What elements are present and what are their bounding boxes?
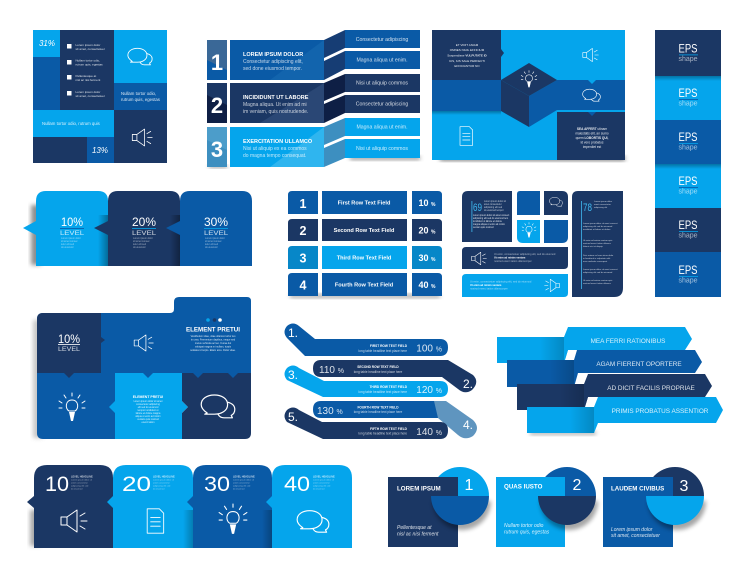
- ribbon 1: [284, 324, 448, 356]
- level tab 20: LEVEL: [132, 231, 157, 237]
- icon tab 30: LEVEL HEADLINE: [233, 474, 255, 478]
- text block bottom right: id vero probatus: [581, 140, 604, 144]
- EPS row 5: [655, 208, 721, 252]
- ribbon 2: long table headline text place here: [354, 370, 403, 374]
- ribbon 4: long table headline text place here: [354, 410, 403, 414]
- panel: circle card 1: LOREM IPSUM: [397, 486, 441, 492]
- ribbon 3: [284, 366, 448, 397]
- text tile 69: veniam quis nostrud: [473, 226, 494, 229]
- panel: numbered icon tabs: [27, 465, 352, 548]
- tile: center text: ELEMENT PRETUI: [133, 395, 163, 399]
- EPS row 3: shape: [678, 144, 698, 152]
- tall text tile 78: Duis autem vel eum iriure dolor: [583, 254, 614, 257]
- wide navy tile: [462, 247, 568, 269]
- tile: center text: exerci tation: [142, 421, 155, 424]
- panel: cube layout: [432, 30, 625, 161]
- table row 4: [288, 273, 442, 296]
- tall text tile 78: esse molestie consequat: [583, 260, 607, 263]
- ribbon 5: FIFTH ROW TEXT FIELD: [370, 427, 408, 431]
- level tab 20: sit amet consec: [133, 240, 150, 243]
- text block top left: Suspendisse VULPUTATE ID: [447, 54, 487, 58]
- text tile: Nullam tortor odio,: [121, 91, 156, 96]
- tall text tile 78: in hendrerit in vulputate velit: [583, 257, 611, 260]
- EPS row 6: shape: [678, 278, 698, 284]
- arrow ribbon 4: PRIMIS PROBATUS ASSENTIOR: [612, 408, 709, 415]
- table row 1: 1: [300, 197, 307, 211]
- right cards: Consectetur adipiscing: [356, 102, 408, 108]
- icon tab 40: Lorem ipsum dolor sit: [313, 478, 334, 482]
- level tab 30: sit amet consec: [205, 240, 222, 243]
- tall text tile 78: 78: [583, 202, 592, 214]
- panel: circle card 2: 2: [573, 477, 582, 494]
- icon: folder speaker: [134, 335, 153, 351]
- icon tab 30: amet consectetur: [233, 482, 250, 484]
- EPS row 3: EPS: [678, 130, 698, 144]
- icon tab 10: do eiusmod: [71, 488, 83, 490]
- panel: EPS column: [655, 30, 721, 297]
- panel: circle card 1: Pellentesque at: [397, 525, 432, 531]
- panel: numbered folded list: [207, 30, 420, 168]
- icon tab 10: 10: [45, 473, 69, 496]
- icon tab 40: adipiscing elit sed: [313, 484, 331, 488]
- EPS row 5: shape: [678, 232, 698, 240]
- panel: square mosaic: [33, 30, 167, 163]
- EPS row 5: EPS: [678, 218, 698, 232]
- tile: 10 percent level: LEVEL: [58, 347, 81, 353]
- tile: 10 percent level: 10%: [58, 332, 80, 346]
- level tab 10: tetur elit sed: [61, 243, 75, 246]
- icon tab 20: do eiusmod: [153, 488, 165, 490]
- text tile 69: [462, 191, 512, 242]
- icon tab 40: [266, 465, 352, 548]
- right cards: [345, 30, 420, 158]
- row 2: INCIDIDUNT UT LABORE: [243, 95, 309, 101]
- right cards: Nisi ut aliquip commos: [356, 146, 408, 152]
- panel: circle card 2: [496, 467, 598, 547]
- checklist panel: [60, 30, 114, 110]
- right cards: Magna aliqua ut enim.: [356, 58, 408, 64]
- ribbon 5: 5.: [288, 410, 298, 424]
- row 1: sed done eiusmod tempor.: [243, 66, 302, 72]
- text tile 69: Lorem ipsum dolor sit amet consect: [473, 214, 510, 217]
- level tab 30: Lorem ipsum dolor: [205, 237, 225, 240]
- panel: level tabs: [23, 191, 252, 266]
- level tab 10: LEVEL: [60, 231, 85, 237]
- ribbon 5: [284, 408, 448, 439]
- checklist panel: sit amet, consectetuer: [76, 47, 105, 51]
- EPS row 6: [655, 252, 721, 297]
- level tab 30: [166, 191, 252, 266]
- EPS row 1: shape: [678, 56, 698, 63]
- icon tab 40: amet consectetur: [313, 482, 330, 484]
- row 1: [207, 40, 324, 80]
- table row 4: 40 %: [419, 280, 436, 290]
- table row 1: [288, 191, 442, 214]
- row 2: im veniam, quis nostrudende.: [243, 109, 308, 115]
- EPS row 2: shape: [678, 100, 698, 108]
- arrow ribbon 3: AD DICIT FACILIS PROPRIAE: [607, 385, 695, 392]
- text block top left: ET VIDIT ANIAM: [456, 43, 479, 47]
- chat panel: [557, 80, 625, 110]
- element text block: sodales id turpis. Etiam arcu. Dolor vitae.: [190, 349, 236, 352]
- element text block: volutpat magna mi nullam, turpis: [195, 346, 232, 348]
- text tile 69: do eiusmod tempor: [484, 209, 504, 212]
- ribbon 1: 1.: [288, 326, 298, 340]
- panel: circle card 2: QUAS IUSTO: [504, 484, 543, 490]
- panel: circle card 3: Lorem ipsum dolor: [611, 527, 653, 533]
- arrow ribbon 1: [497, 327, 692, 363]
- small tiles: [517, 191, 568, 243]
- folds: [324, 30, 345, 167]
- icon: speaker: [583, 48, 598, 62]
- EPS row 6: EPS: [678, 263, 698, 277]
- tall text tile 78: adipiscing elit sed do eiusmod: [583, 271, 613, 274]
- panel: arrow ribbons: [497, 327, 723, 435]
- icon: document: [460, 127, 473, 145]
- EPS row 4: shape: [678, 188, 698, 196]
- icon tab 20: LEVEL HEADLINE: [153, 474, 175, 478]
- element text block: metus vehicula ac leo. Curae dui: [195, 342, 232, 345]
- level tab 10: Lorem ipsum dolor: [61, 237, 81, 240]
- tile: center text: Lorem ipsum dolor sit amet: [134, 400, 163, 403]
- table row 4: Fourth Row Text Field: [335, 282, 394, 288]
- wide sky tile: [462, 274, 568, 297]
- level tab 20: Lorem ipsum dolor: [133, 237, 153, 240]
- icon tab 40: 40: [284, 473, 310, 496]
- tile: center text: elit sed do eiusmod: [138, 406, 159, 409]
- row 3: Nisi ut aliquip ex ea commos: [243, 146, 307, 152]
- ribbon 2: SECOND ROW TEXT FIELD: [357, 365, 399, 369]
- panel: element folder: [33, 297, 251, 439]
- ribbon 2: 2.: [463, 377, 473, 391]
- row 3: EXERCITATION ULLAMCO: [243, 139, 313, 145]
- percent tile 13: 13%: [92, 146, 108, 155]
- row 2: Magna aliqua. Ut enim ad mi: [243, 102, 307, 108]
- table row 1: 10 %: [419, 198, 436, 208]
- row 3: [207, 127, 324, 167]
- icon tab 40: do eiusmod: [313, 488, 325, 490]
- wide sky tile: Ut enim ad minim veniam: [470, 283, 502, 287]
- icon tab 20: [107, 465, 193, 548]
- text block bottom right: imperdiet est: [583, 145, 601, 149]
- row 2: 2: [211, 93, 223, 118]
- right cards: Consectetur adipiscing: [356, 37, 408, 43]
- tall text tile 78: Ut enim ad minim veniam quis: [583, 279, 613, 282]
- text block top left: IUS, IUS SALE PERFECTI: [449, 59, 485, 63]
- icon tab 10: [27, 465, 113, 548]
- text block bottom right: maiestatis elit, an sumo: [575, 132, 609, 136]
- EPS row 2: [655, 76, 721, 120]
- row 1: LOREM IPSUM DOLOR: [243, 52, 303, 58]
- icon tab 20: Lorem ipsum dolor sit: [153, 478, 174, 482]
- text band: Nullam tortor odio, rutrum quis: [42, 121, 100, 126]
- level tab 30: tetur elit sed: [205, 243, 219, 246]
- tall text tile 78: nostrud exerci tation ullamco: [583, 282, 612, 285]
- text block top left: EFFICIANTUR NO: [454, 64, 480, 68]
- tall text tile 78: laboris nisi ut aliquip: [583, 245, 603, 248]
- element text block: [186, 318, 240, 352]
- ribbon 3: 3.: [288, 368, 298, 382]
- icon tab 20: amet consectetur: [153, 482, 170, 484]
- tall text tile 78: incididunt ut labore et dolore: [583, 228, 611, 231]
- ribbon 3: 120 %: [416, 385, 442, 396]
- icon tab 10: Lorem ipsum dolor sit: [71, 478, 92, 482]
- text tile 69: magna aliqua ut enim ad minim: [473, 223, 505, 226]
- right cards: Magna aliqua ut enim.: [356, 124, 408, 130]
- tall text tile 78: amet consectetur: [594, 203, 611, 206]
- text tile 69: adipiscing elit sed: [484, 206, 503, 209]
- checklist panel: Nullam tortor odio,: [76, 58, 100, 62]
- table row 3: 30 %: [419, 253, 436, 263]
- table row 2: 20 %: [419, 226, 436, 236]
- table row 2: [288, 219, 442, 241]
- icon tab 30: 30: [204, 473, 230, 496]
- table row 2: 2: [300, 224, 307, 238]
- checklist panel: nisl ac nisi ferment: [76, 78, 101, 82]
- arrow ribbon 1: MEA FERRI RATIONIBUS: [591, 338, 665, 345]
- table row 3: 3: [300, 252, 307, 266]
- panel: circle card 3: [603, 467, 706, 547]
- level tab 30: do eiusmod: [205, 246, 218, 249]
- level tab 10: sit amet consec: [61, 240, 78, 243]
- panel: four-row table: [288, 191, 442, 298]
- tall text tile 78: nostrud exerci tation ullamco: [583, 242, 612, 245]
- panel: circle card 3: sit amet, consectetuer: [611, 533, 660, 539]
- panel: circle card 3: LAUDEM CIVIBUS: [611, 486, 664, 492]
- EPS row 4: [655, 164, 721, 208]
- table row 2: Second Row Text Field: [334, 228, 395, 234]
- icon tab 30: do eiusmod: [233, 488, 245, 490]
- level tab 20: do eiusmod: [133, 246, 146, 249]
- text tile: [114, 83, 167, 110]
- text tile 69: Lorem ipsum dolor sit: [484, 200, 506, 203]
- icon tab 20: adipiscing elit sed: [153, 484, 171, 488]
- ribbon 5: 140 %: [416, 427, 442, 438]
- level tab 20: [94, 191, 180, 266]
- right cards: Nisi ut aliquip commos: [356, 80, 408, 86]
- tall text tile 78: Ut enim ad minim veniam quis: [583, 239, 613, 242]
- text block bottom right: SEA AFFERT utinam: [577, 127, 607, 131]
- arrow ribbon 2: AGAM FIERENT OPORTERE: [596, 361, 682, 368]
- tall text tile 78: Lorem ipsum dolor: [594, 200, 612, 203]
- ribbon 2: 110 %: [319, 365, 344, 376]
- panel: circle card 2: Nullam tortor odio: [504, 523, 544, 529]
- table row 3: Third Row Text Field: [337, 256, 392, 262]
- ribbon 2: [313, 360, 476, 392]
- level tab 20: tetur elit sed: [133, 243, 147, 246]
- tile: center text: tempor incididunt ut: [138, 409, 159, 412]
- ribbon 3: long table headline text place here: [358, 390, 407, 394]
- checklist panel: Pellentesque at: [76, 74, 96, 78]
- panel: rounded tile dashboard: [462, 191, 623, 297]
- row 2: [207, 83, 324, 123]
- EPS row 1: EPS: [678, 42, 698, 56]
- wide navy tile: nostrud exerci tation ullamcorper: [494, 259, 532, 263]
- icon tab 20: 20: [122, 473, 151, 496]
- icon tab 40: LEVEL HEADLINE: [313, 474, 335, 478]
- text block bottom right: [557, 112, 625, 160]
- arrow ribbon 4: [527, 397, 723, 433]
- text block bottom right: quem LOBORTIS QUI,: [576, 136, 608, 140]
- table row 1: First Row Text Field: [338, 200, 391, 206]
- EPS row 4: EPS: [678, 174, 698, 188]
- panel: circle card 2: rutrum quis, egestas: [504, 530, 550, 536]
- panel: ribbon rows: [284, 324, 477, 439]
- arrow ribbon 3: [517, 374, 712, 410]
- level tab 10: do eiusmod: [61, 246, 74, 249]
- row 1: 1: [211, 50, 223, 75]
- level tab 10: [23, 191, 108, 266]
- wide sky tile: nostrud exerci tation ullamcorper: [470, 286, 508, 290]
- text tile 69: 69: [473, 202, 482, 214]
- text tile 69: amet consectetur: [484, 203, 502, 206]
- speaker tile: [114, 110, 167, 163]
- tall text tile 78: adipiscing elit sed do eiusmod: [583, 225, 613, 228]
- tile: center text: veniam quis nostrud: [137, 418, 159, 421]
- row 3: do magna tempo consequat.: [243, 153, 306, 159]
- EPS row 2: EPS: [678, 86, 698, 100]
- table row 4: 4: [300, 278, 307, 292]
- panel: circle card 3: 3: [680, 478, 689, 495]
- ribbon 3: THIRD ROW TEXT FIELD: [369, 385, 408, 389]
- percent tile 31: 31%: [39, 39, 55, 48]
- icon tab 30: Lorem ipsum dolor sit: [233, 478, 254, 482]
- text block top left: [432, 30, 504, 80]
- row 3: 3: [211, 137, 223, 162]
- level tab 20: 20%: [132, 215, 156, 229]
- tall text tile 78: Lorem ipsum dolor sit amet consect: [583, 222, 618, 225]
- checklist panel: Lorem ipsum dolor: [76, 90, 100, 94]
- wide navy tile: Ut enim ad minim veniam: [494, 256, 526, 260]
- ribbon 1: FIRST ROW TEXT FIELD: [370, 344, 408, 348]
- ribbon 1: long table headline text place here: [358, 349, 407, 353]
- panel: circle card 1: nisl ac nisi ferment: [397, 532, 439, 538]
- wide sky tile: Ut enim, consectetuer adipiscing elit, sed do eiusmod: [470, 280, 532, 284]
- ribbon 4: 4.: [463, 418, 473, 432]
- text tile 69: adipiscing elit sed do eiusmod tem: [473, 217, 508, 220]
- icon tab 10: LEVEL HEADLINE: [71, 474, 93, 478]
- level tab 10: 10%: [61, 215, 83, 229]
- level tab 30: 30%: [204, 215, 228, 229]
- level tab 30: LEVEL: [204, 231, 229, 237]
- ribbon 4: [313, 401, 477, 438]
- element text block: ELEMENT PRETUI: [186, 326, 240, 334]
- wide navy tile: Ut enim, consectetuer adipiscing elit, sed do eiusmod: [494, 252, 556, 256]
- icon tab 10: adipiscing elit sed: [71, 484, 89, 488]
- ribbon 5: long table headline text place here: [358, 432, 407, 436]
- element text block: Vestibulum vitae, vitae ullamco tortor leo: [191, 335, 236, 338]
- icon tab 30: adipiscing elit sed: [233, 484, 251, 488]
- cube: [501, 63, 557, 127]
- chat tile: [114, 30, 167, 83]
- text block top left: OMNES NIHIL EFFICIUM: [450, 48, 485, 52]
- tall text tile 78: [572, 191, 623, 297]
- tile: center text: aliqua ut enim ad minim: [135, 415, 161, 418]
- checklist panel: rutrum quis, egestas: [76, 62, 103, 66]
- tile: bulb: [37, 373, 115, 439]
- icon tab 10: amet consectetur: [71, 482, 88, 484]
- tall text tile 78: adipiscing elit: [594, 206, 608, 209]
- element text block: in urna. Fermentum dapibus, neque sed: [191, 338, 236, 342]
- arrow ribbon 2: [507, 350, 702, 387]
- checklist panel: sit amet, consectetuer: [76, 94, 105, 98]
- row 1: Consectetur adipiscing elit,: [243, 59, 303, 65]
- panel: circle card 1: [388, 467, 491, 547]
- panel: circle card 1: 1: [465, 477, 474, 494]
- ribbon 4: 130 %: [317, 406, 343, 417]
- tile: center text: labore et dolore magna: [136, 412, 161, 415]
- tile: chat: [182, 373, 251, 439]
- checklist panel: Lorem ipsum dolor: [76, 43, 100, 47]
- ribbon 4: FOURTH ROW TEXT FIELD: [357, 406, 399, 410]
- table row 3: [288, 246, 442, 269]
- text tile: rutrum quis, egestas: [121, 97, 160, 102]
- ribbon 1: 100 %: [416, 344, 442, 354]
- tile: center text: consectetur adipiscing: [136, 403, 160, 406]
- tile: 10 percent level: [37, 313, 105, 373]
- icon tab 30: [187, 465, 272, 548]
- tall text tile 78: Lorem ipsum dolor sit amet consect: [583, 268, 618, 271]
- folder back: [37, 297, 251, 373]
- text tile 69: incididunt ut labore et dolore: [473, 220, 503, 223]
- EPS row 1: [655, 30, 721, 76]
- tile: center text: [109, 373, 188, 439]
- EPS row 3: [655, 120, 721, 164]
